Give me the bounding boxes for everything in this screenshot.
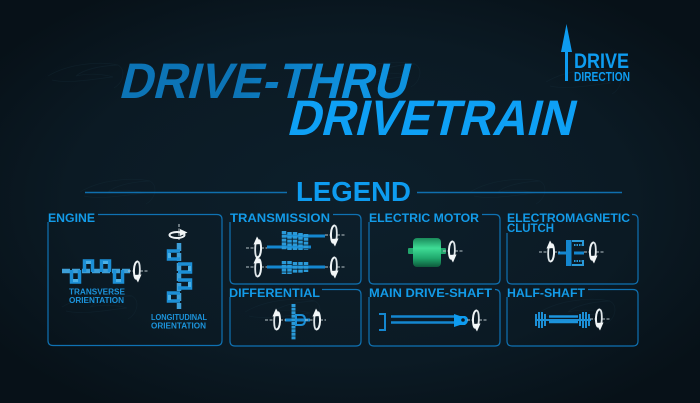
clutch heading: CLUTCH [507, 223, 554, 235]
icon: transverse rotation arrow [128, 261, 149, 282]
direction label: DIRECTION [574, 69, 630, 84]
title line 2: DRIVETRAIN [283, 90, 583, 146]
clutch heading [507, 213, 630, 235]
icon: lower gearset [267, 261, 325, 274]
icon: rotation arrow [590, 309, 611, 330]
title [115, 53, 583, 146]
icon: differential gear [285, 304, 310, 340]
legend heading: LEGEND [296, 176, 411, 207]
panel: engine [48, 213, 222, 346]
icon: half shaft [535, 312, 591, 328]
faint background swooshes [48, 62, 621, 324]
icon: rotation arrows [265, 308, 326, 330]
longitudinal label: LONGITUDINAL [151, 313, 207, 322]
title line 1: DRIVE-THRU [115, 53, 417, 109]
icon: drive shaft [379, 314, 468, 330]
transmission heading: TRANSMISSION [230, 213, 330, 225]
panel: electromagnetic clutch [507, 213, 638, 284]
panel: half-shaft [507, 288, 638, 346]
panel: main drive-shaft [369, 288, 500, 346]
panel: transmission [230, 213, 361, 284]
clutch heading: ELECTROMAGNETIC [507, 213, 630, 225]
differential heading: DIFFERENTIAL [229, 288, 320, 300]
main drive-shaft heading: MAIN DRIVE-SHAFT [369, 288, 492, 300]
icon: clutch [558, 240, 584, 266]
half-shaft heading: HALF-SHAFT [507, 288, 585, 300]
icon: green motor [408, 238, 446, 267]
electric motor heading: ELECTRIC MOTOR [369, 213, 480, 225]
icon: rotation arrows [539, 240, 605, 264]
engine heading: ENGINE [48, 213, 95, 225]
icon: upper gearset [267, 231, 325, 250]
icon: rotation arrow [443, 241, 464, 262]
panel: electric motor [369, 213, 500, 284]
orientation label: ORIENTATION [151, 322, 206, 330]
icon: up arrow [561, 24, 572, 81]
icon: longitudinal crankshaft [168, 243, 190, 309]
icon: rotation arrows [246, 225, 346, 278]
icon: transverse crankshaft [62, 261, 130, 282]
transverse label: TRANSVERSE [69, 288, 126, 296]
icon: rotation arrow [467, 310, 488, 332]
panel: differential [229, 288, 361, 346]
drive direction indicator [561, 24, 630, 84]
drive label: DRIVE [574, 50, 629, 73]
orientation label: ORIENTATION [69, 296, 124, 305]
icon: longitudinal rotation arrow [170, 224, 188, 240]
